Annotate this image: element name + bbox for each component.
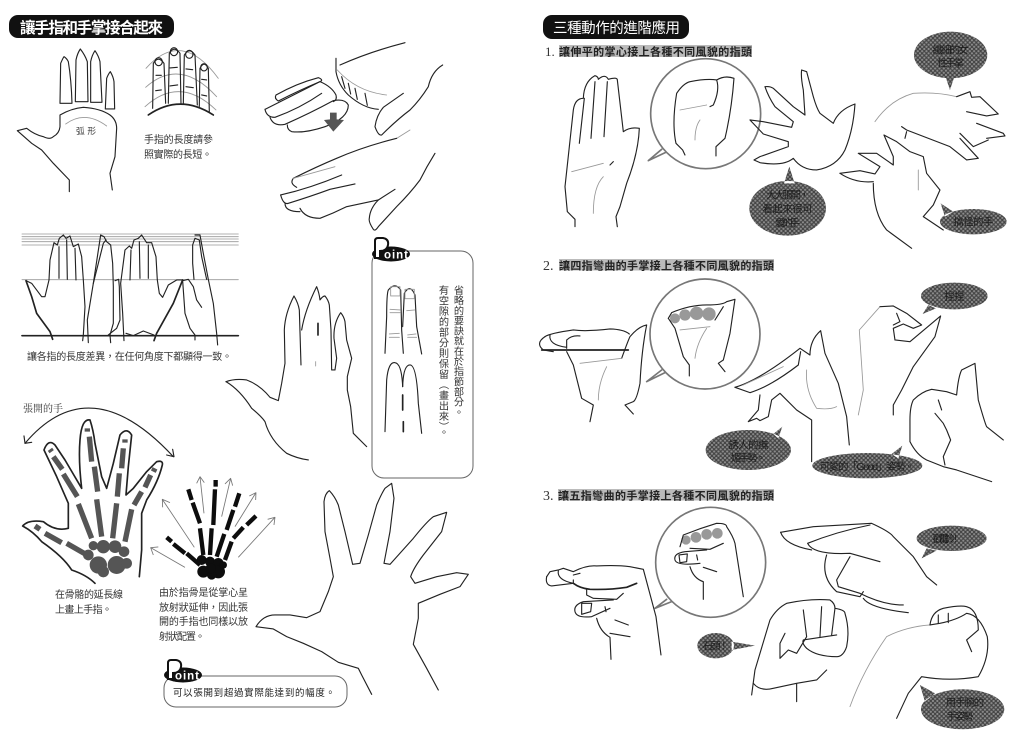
illustration: thumbs up fist xyxy=(910,363,1003,482)
text: point note: 可以張開到超過實際能達到的幅度。 xyxy=(173,687,335,699)
panel: point box on omitting knuckles xyxy=(372,238,473,478)
callout bubble: spread hand: 看起來很可 xyxy=(763,203,813,216)
callout bubble: curled wrist: 用手腕的 xyxy=(946,696,984,709)
icon: point badge: oint xyxy=(384,250,408,262)
arrow: spread arc xyxy=(24,408,174,457)
title: right page xyxy=(543,15,689,39)
callout bubble: clawed hand: 搞怪的手 xyxy=(953,216,993,229)
illustration: black skeleton hand xyxy=(167,480,256,580)
text: bone caption left xyxy=(55,588,123,616)
illustration: separate fingers and palm with arc xyxy=(17,49,117,192)
icon: point badge xyxy=(372,238,410,262)
callout: four fingers close-up xyxy=(647,279,760,389)
heading: section 2: 2. xyxy=(543,259,554,274)
callout bubble: clawed hand xyxy=(940,203,1007,234)
text: finger length note: 照實際的長短。 xyxy=(144,148,212,161)
panel: point box on spread width xyxy=(164,660,347,707)
icon: down arrow on fist xyxy=(324,113,344,132)
text: bone caption left: 上畫上手指。 xyxy=(55,603,112,616)
illustration: pressing doorbell hand xyxy=(781,523,937,613)
text: finger length caption: 讓各指的長度差異，在任何角度下都顯得一致。 xyxy=(27,350,232,363)
text: point note vertical second column: 有空隙的部分則保留（畫出來）。 xyxy=(436,284,449,437)
illustration: curled wrist hand xyxy=(850,606,988,718)
callout bubble: beckoning: 誘人的撫 xyxy=(728,438,768,451)
callout bubble: pinch: 捏捏 xyxy=(944,290,964,303)
callout bubble: curled wrist: 手姿勢 xyxy=(947,710,974,723)
illustration: pinching hand xyxy=(858,306,941,415)
callout bubble: slender hand xyxy=(914,32,987,90)
label: open hand: 張開的手 xyxy=(23,403,63,415)
text: finger length note xyxy=(144,133,213,161)
callout bubble: slender hand: 纖細的女 xyxy=(933,43,969,56)
callout bubble: curled wrist xyxy=(920,685,1004,729)
heading: section 3: 3. xyxy=(543,489,554,504)
illustration: large spread hand xyxy=(256,483,468,694)
callout: flat palm close-up xyxy=(648,59,761,169)
callout bubble: rock: 石頭！ xyxy=(702,641,729,653)
callout bubble: doorbell: 戳電鈴！ xyxy=(932,532,961,545)
callout bubble: good pose: 可愛的「Good」姿勢。 xyxy=(820,460,915,473)
text: bone caption right: 放射狀延伸，因此張 xyxy=(159,601,248,614)
illustration: four fingers bent hand xyxy=(540,325,647,422)
icon: point badge xyxy=(164,660,202,682)
illustration: flat palm hand xyxy=(565,76,639,227)
text: finger length note: 手指的長度請參 xyxy=(144,133,213,146)
illustration: large hand back view xyxy=(226,287,367,460)
title: left page xyxy=(9,15,174,38)
illustration: fingers simplified xyxy=(385,363,422,433)
callout bubble: rock xyxy=(697,633,755,658)
callout: five fingers close-up xyxy=(655,507,766,617)
illustration: wide spread hand xyxy=(750,70,855,170)
illustration: separate fingers and palm with arc: 弧形 xyxy=(76,125,96,136)
text: bone caption right: 由於指骨是從掌心呈 xyxy=(159,586,248,599)
illustration: fingers with knuckles xyxy=(385,286,422,354)
callout bubble: spread hand xyxy=(749,167,826,236)
illustration: rock fist xyxy=(752,600,848,702)
illustration: lower hand from above xyxy=(281,130,435,230)
title: right page: 三種動作的進階應用 xyxy=(553,19,680,37)
heading: section 1: 讓伸平的掌心接上各種不同風貌的指頭 xyxy=(559,44,752,58)
illustration: clawed hand xyxy=(840,135,943,248)
illustration: beckoning waist hand xyxy=(735,331,849,462)
illustration: upper hands with overlapped fingers xyxy=(265,43,443,135)
callout bubble: beckoning xyxy=(706,427,791,470)
text: point note vertical first column: 省略的要訣就在於指節部分。 xyxy=(452,284,464,417)
icon: point badge: oint xyxy=(175,670,199,682)
callout bubble: beckoning: 媚手勢。 xyxy=(731,452,766,465)
text: bone caption left: 在骨骼的延長線 xyxy=(55,588,123,601)
title: left page: 讓手指和手掌接合起來 xyxy=(20,18,163,37)
callout bubble: spread hand: 愛的手 xyxy=(775,217,800,230)
illustration: finger length guide lines xyxy=(22,234,238,345)
illustration: slender female hand xyxy=(875,92,1005,160)
callout bubble: spread hand: 大大張開， xyxy=(766,188,809,201)
callout bubble: pinch xyxy=(921,283,988,314)
illustration: open hand with halftone bones xyxy=(23,420,162,583)
text: bone caption right xyxy=(159,586,248,643)
callout bubble: doorbell xyxy=(917,526,987,558)
heading: section 2: 讓四指彎曲的手掌接上各種不同風貌的指頭 xyxy=(559,258,774,272)
heading: section 1: 1. xyxy=(545,44,555,59)
text: bone caption right: 射狀配置。 xyxy=(159,630,205,643)
illustration: five fingers bent hand xyxy=(546,566,661,659)
text: bone caption right: 開的手指也同樣以放 xyxy=(159,615,248,628)
callout bubble: good pose xyxy=(812,446,922,478)
illustration: finger length arcs diagram xyxy=(145,48,218,115)
arrows: radiating finger directions xyxy=(151,477,275,567)
heading: section 3: 讓五指彎曲的手掌接上各種不同風貌的指頭 xyxy=(558,488,774,502)
callout bubble: slender hand: 性手掌 xyxy=(937,57,964,70)
